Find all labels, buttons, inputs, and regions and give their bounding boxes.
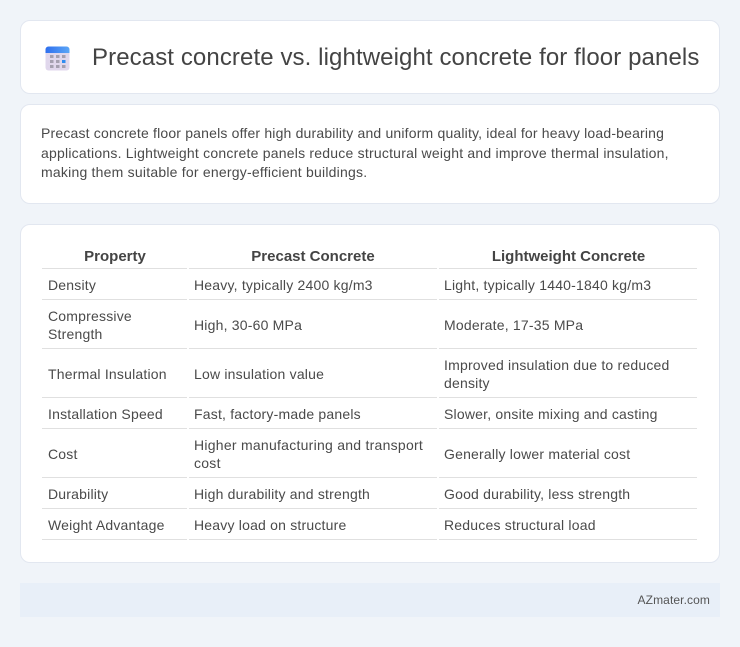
row: installation speed — [48, 406, 658, 422]
title: Precast concrete vs. lightweight concrete for floor panels — [92, 44, 699, 71]
row: installation speed: Fast, factory-made panels — [194, 406, 361, 422]
intro paragraph: Precast concrete floor panels offer high durability and uniform quality, ideal for heavy load-bearing — [41, 125, 664, 141]
row: density: Density — [48, 277, 96, 293]
comparison table — [42, 248, 697, 540]
row: cost: cost — [194, 455, 221, 471]
row: density: Light, typically 1440-1840 kg/m3 — [444, 277, 651, 293]
footer source text: AZmater.com — [638, 593, 710, 607]
row: compressive strength: Strength — [48, 326, 103, 342]
row: density — [48, 277, 651, 293]
row: compressive strength: High, 30-60 MPa — [194, 317, 302, 333]
row: density: Heavy, typically 2400 kg/m3 — [194, 277, 373, 293]
row: weight advantage: Weight Advantage — [48, 517, 165, 533]
row: thermal insulation: Thermal Insulation — [48, 366, 167, 382]
row: thermal insulation: Low insulation value — [194, 366, 324, 382]
row: durability: High durability and strength — [194, 486, 370, 502]
row: installation speed: Installation Speed — [48, 406, 163, 422]
row: weight advantage — [48, 517, 596, 533]
intro paragraph: applications. Lightweight concrete panels reduce structural weight and improve thermal insulation, — [41, 145, 669, 161]
icon: calendar — [46, 46, 70, 70]
row: installation speed: Slower, onsite mixing and casting — [444, 406, 658, 422]
row: durability — [48, 486, 630, 502]
row: durability: Good durability, less strength — [444, 486, 630, 502]
panel: comparison table — [20, 224, 720, 563]
intro paragraph: making them suitable for energy-efficient buildings. — [41, 164, 367, 180]
row: cost: Higher manufacturing and transport — [194, 437, 423, 453]
row: weight advantage: Heavy load on structure — [194, 517, 346, 533]
row: weight advantage: Reduces structural load — [444, 517, 596, 533]
panel: title header — [20, 20, 720, 94]
intro paragraph — [41, 125, 669, 180]
row: thermal insulation: density — [444, 375, 490, 391]
row: compressive strength — [48, 308, 584, 342]
footer bar — [20, 583, 720, 617]
panel: intro text — [20, 104, 720, 204]
row: compressive strength: Moderate, 17-35 MPa — [444, 317, 583, 333]
table header — [84, 248, 645, 265]
table header: Property — [84, 248, 146, 265]
row: thermal insulation: Improved insulation due to reduced — [444, 357, 670, 373]
row: compressive strength: Compressive — [48, 308, 132, 324]
row: thermal insulation — [48, 357, 670, 391]
row: cost: Cost — [48, 446, 78, 462]
row: cost — [48, 437, 630, 471]
table header: Precast Concrete — [251, 248, 375, 265]
row: cost: Generally lower material cost — [444, 446, 630, 462]
row: durability: Durability — [48, 486, 108, 502]
table header: Lightweight Concrete — [492, 248, 645, 265]
